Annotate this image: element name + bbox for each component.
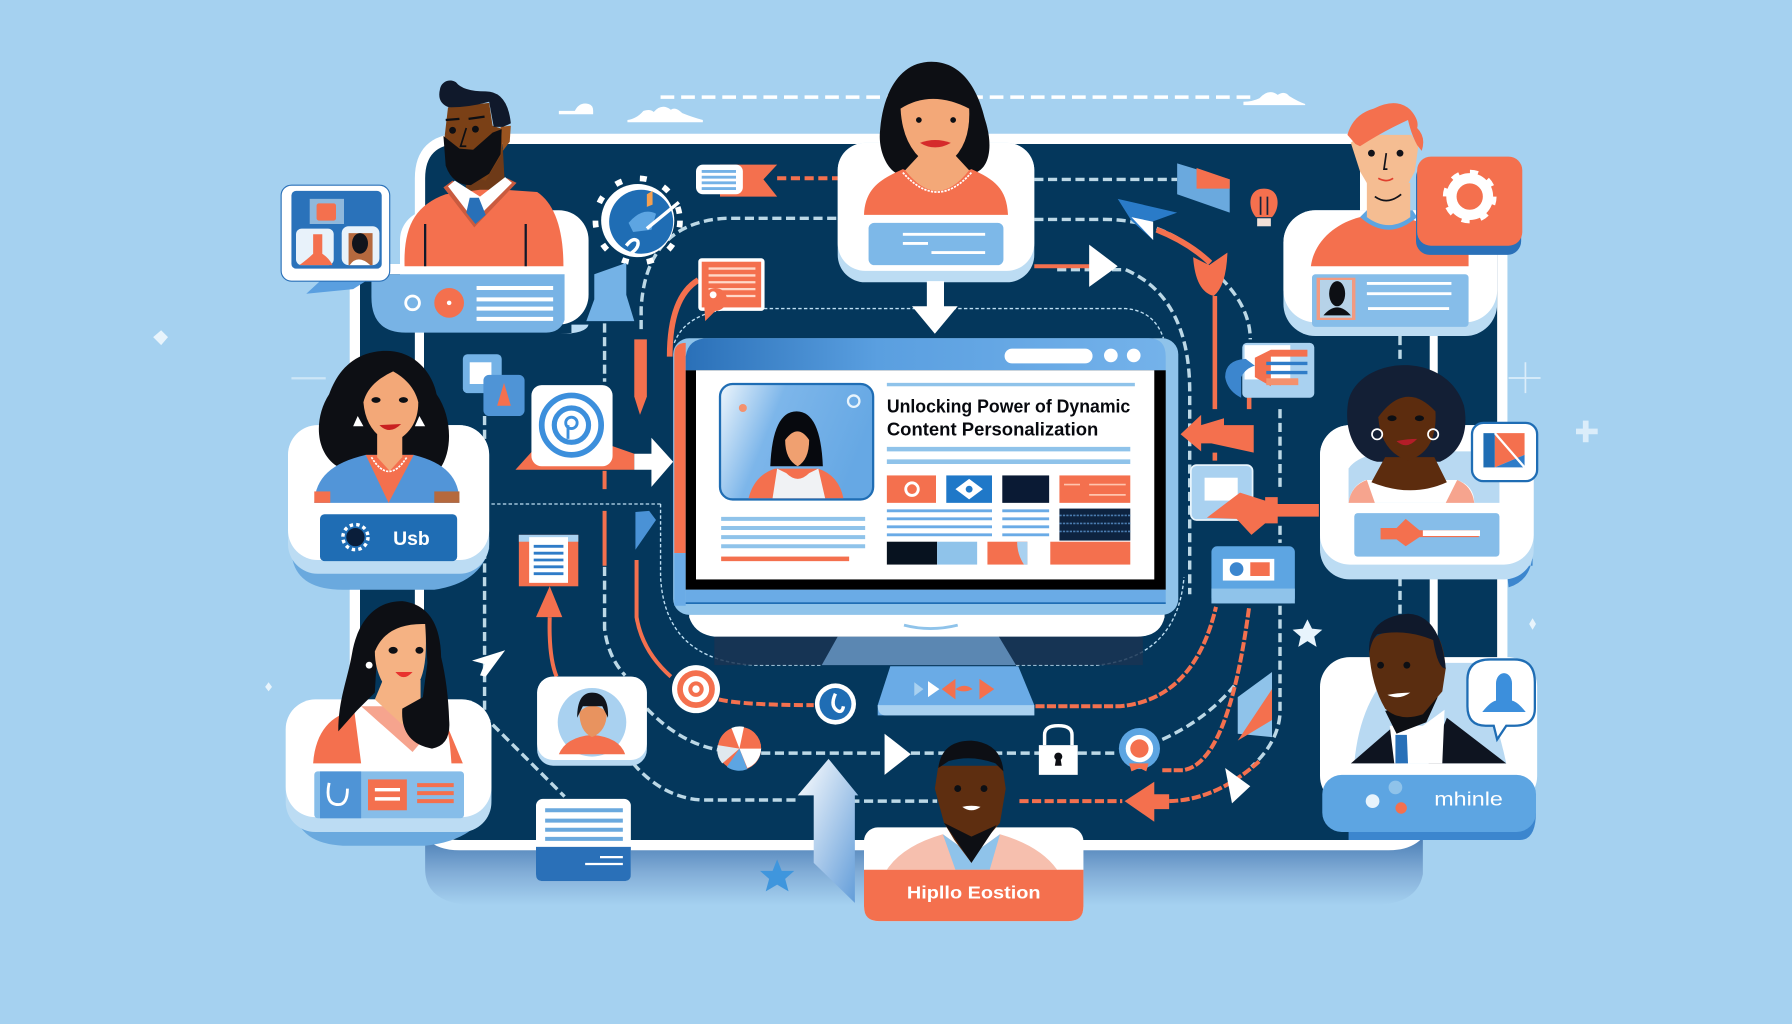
woman hair	[319, 351, 449, 469]
bottom tile row	[887, 542, 1130, 565]
man face	[935, 766, 1006, 863]
flag coral inset	[1197, 168, 1230, 189]
man torso	[404, 190, 563, 266]
coral up arrow head	[536, 586, 562, 617]
redhead face	[1351, 135, 1418, 201]
icon: gauge gear	[595, 178, 680, 263]
coral wedge	[1238, 689, 1272, 741]
woman face	[375, 624, 426, 693]
woman neck	[375, 680, 421, 725]
white triangle arrow	[1225, 768, 1250, 803]
chat document arrow	[1225, 343, 1314, 398]
man ear	[501, 126, 511, 151]
monitor screen	[696, 370, 1154, 579]
coral connector curves	[550, 178, 1261, 801]
woman neck	[377, 434, 402, 471]
coral label	[864, 870, 1083, 921]
small square tiles	[463, 354, 525, 416]
coral left arrow	[1125, 782, 1169, 822]
inner frame strips	[415, 331, 1438, 663]
top woman panel	[869, 223, 1003, 265]
monitor stand neck	[822, 637, 1016, 665]
Usb panel: Usb	[393, 528, 430, 550]
monitor top bar	[686, 338, 1166, 370]
redhead panel	[1312, 274, 1469, 327]
man portrait tile	[537, 677, 647, 766]
thumbnail card	[281, 185, 390, 294]
top woman hair	[880, 62, 989, 174]
arrow: down into monitor	[912, 281, 958, 334]
blue trapezoid marker	[586, 263, 634, 321]
white triangle on dashed line	[885, 734, 911, 775]
coral label: Hipllo Eostion	[907, 882, 1041, 902]
navy board with white frame	[360, 144, 1497, 840]
bottom right speech icon	[1467, 659, 1535, 739]
icon tile: diagonal	[1472, 423, 1537, 481]
card: man bottom right	[1320, 614, 1537, 840]
man collar and tie	[443, 177, 517, 227]
grey dashed connector curves	[485, 179, 1400, 801]
woman face	[363, 371, 418, 443]
card: woman left middle	[288, 351, 489, 590]
tile with hand arrow	[1191, 465, 1319, 535]
flag top right	[1177, 163, 1230, 213]
clouds and top dashes	[559, 92, 1305, 122]
white star	[1293, 619, 1322, 647]
icon: gear badge	[1119, 728, 1160, 771]
man torso	[887, 834, 1057, 870]
woman hair	[338, 601, 449, 749]
icon: phone circle	[815, 683, 856, 725]
suit	[1351, 718, 1506, 763]
face	[1369, 632, 1446, 717]
right woman hair	[1347, 365, 1465, 462]
right woman panel	[1354, 513, 1499, 557]
star blue	[760, 859, 794, 891]
man info panel	[371, 274, 565, 333]
monitor shadow	[714, 637, 1143, 665]
icon: pie	[717, 726, 761, 771]
card: bearded man	[371, 80, 589, 334]
big coral arrow left	[1181, 415, 1254, 453]
top woman face	[901, 99, 969, 169]
man hair	[439, 80, 511, 127]
coral shield	[1193, 253, 1227, 296]
redhead torso	[1311, 217, 1469, 266]
card: woman bottom left	[286, 601, 491, 846]
monitor	[673, 338, 1178, 715]
right woman neck	[1371, 457, 1447, 490]
card: woman right	[1320, 365, 1534, 587]
tile row	[887, 475, 1130, 503]
screen title: Unlocking Power of Dynamic	[887, 396, 1130, 417]
photo tile	[720, 384, 873, 499]
target tile	[531, 385, 613, 466]
card: redhead man	[1283, 103, 1497, 336]
arrow: white triangle right top	[1089, 245, 1118, 287]
mhinle panel	[1322, 775, 1536, 832]
right woman top	[1349, 480, 1474, 503]
coral dagger arrow	[634, 339, 647, 415]
card: woman top center	[838, 62, 1034, 282]
icon: target circle	[672, 665, 720, 713]
plane white tail	[1131, 217, 1153, 240]
man neck	[464, 149, 505, 191]
man neck shadow	[1385, 697, 1438, 734]
gear tile	[1416, 157, 1522, 255]
icon: lock	[1039, 726, 1078, 775]
board shadow	[425, 840, 1423, 905]
right woman face	[1378, 397, 1436, 461]
white lightning	[472, 650, 505, 677]
monitor bezel	[686, 370, 1166, 590]
icon: light bulb	[1250, 189, 1278, 226]
coral and blue flag	[1238, 672, 1272, 737]
mhinle panel: mhinle	[1434, 789, 1503, 811]
small blue card	[1211, 546, 1295, 603]
woman torso	[313, 706, 463, 763]
doc icon with coral backing	[519, 535, 578, 586]
blue plane arrow	[1118, 199, 1177, 240]
man beard	[443, 129, 502, 185]
connector paths	[485, 178, 1400, 801]
coral base and right arrow	[515, 438, 673, 487]
decorative sparkles	[153, 330, 1598, 691]
thin dashed loop around monitor	[491, 309, 1184, 665]
chat tile coral	[698, 258, 765, 321]
man face	[445, 103, 503, 181]
Usb panel	[320, 514, 457, 561]
arrow: white up	[798, 759, 858, 903]
screen title: Content Personalization	[887, 418, 1098, 439]
monitor stand foot	[878, 666, 1034, 715]
monitor body	[673, 338, 1178, 615]
redhead hair	[1347, 103, 1423, 151]
woman panel	[314, 771, 464, 818]
redhead neck	[1367, 183, 1410, 225]
doc card bottom	[536, 799, 631, 881]
top woman torso	[864, 169, 1008, 215]
top note tile with coral tail	[696, 165, 777, 197]
blue flag	[635, 511, 656, 550]
screen title	[887, 396, 1130, 439]
card: man bottom center	[864, 741, 1083, 921]
woman torso	[314, 455, 459, 503]
monitor base	[689, 611, 1165, 637]
